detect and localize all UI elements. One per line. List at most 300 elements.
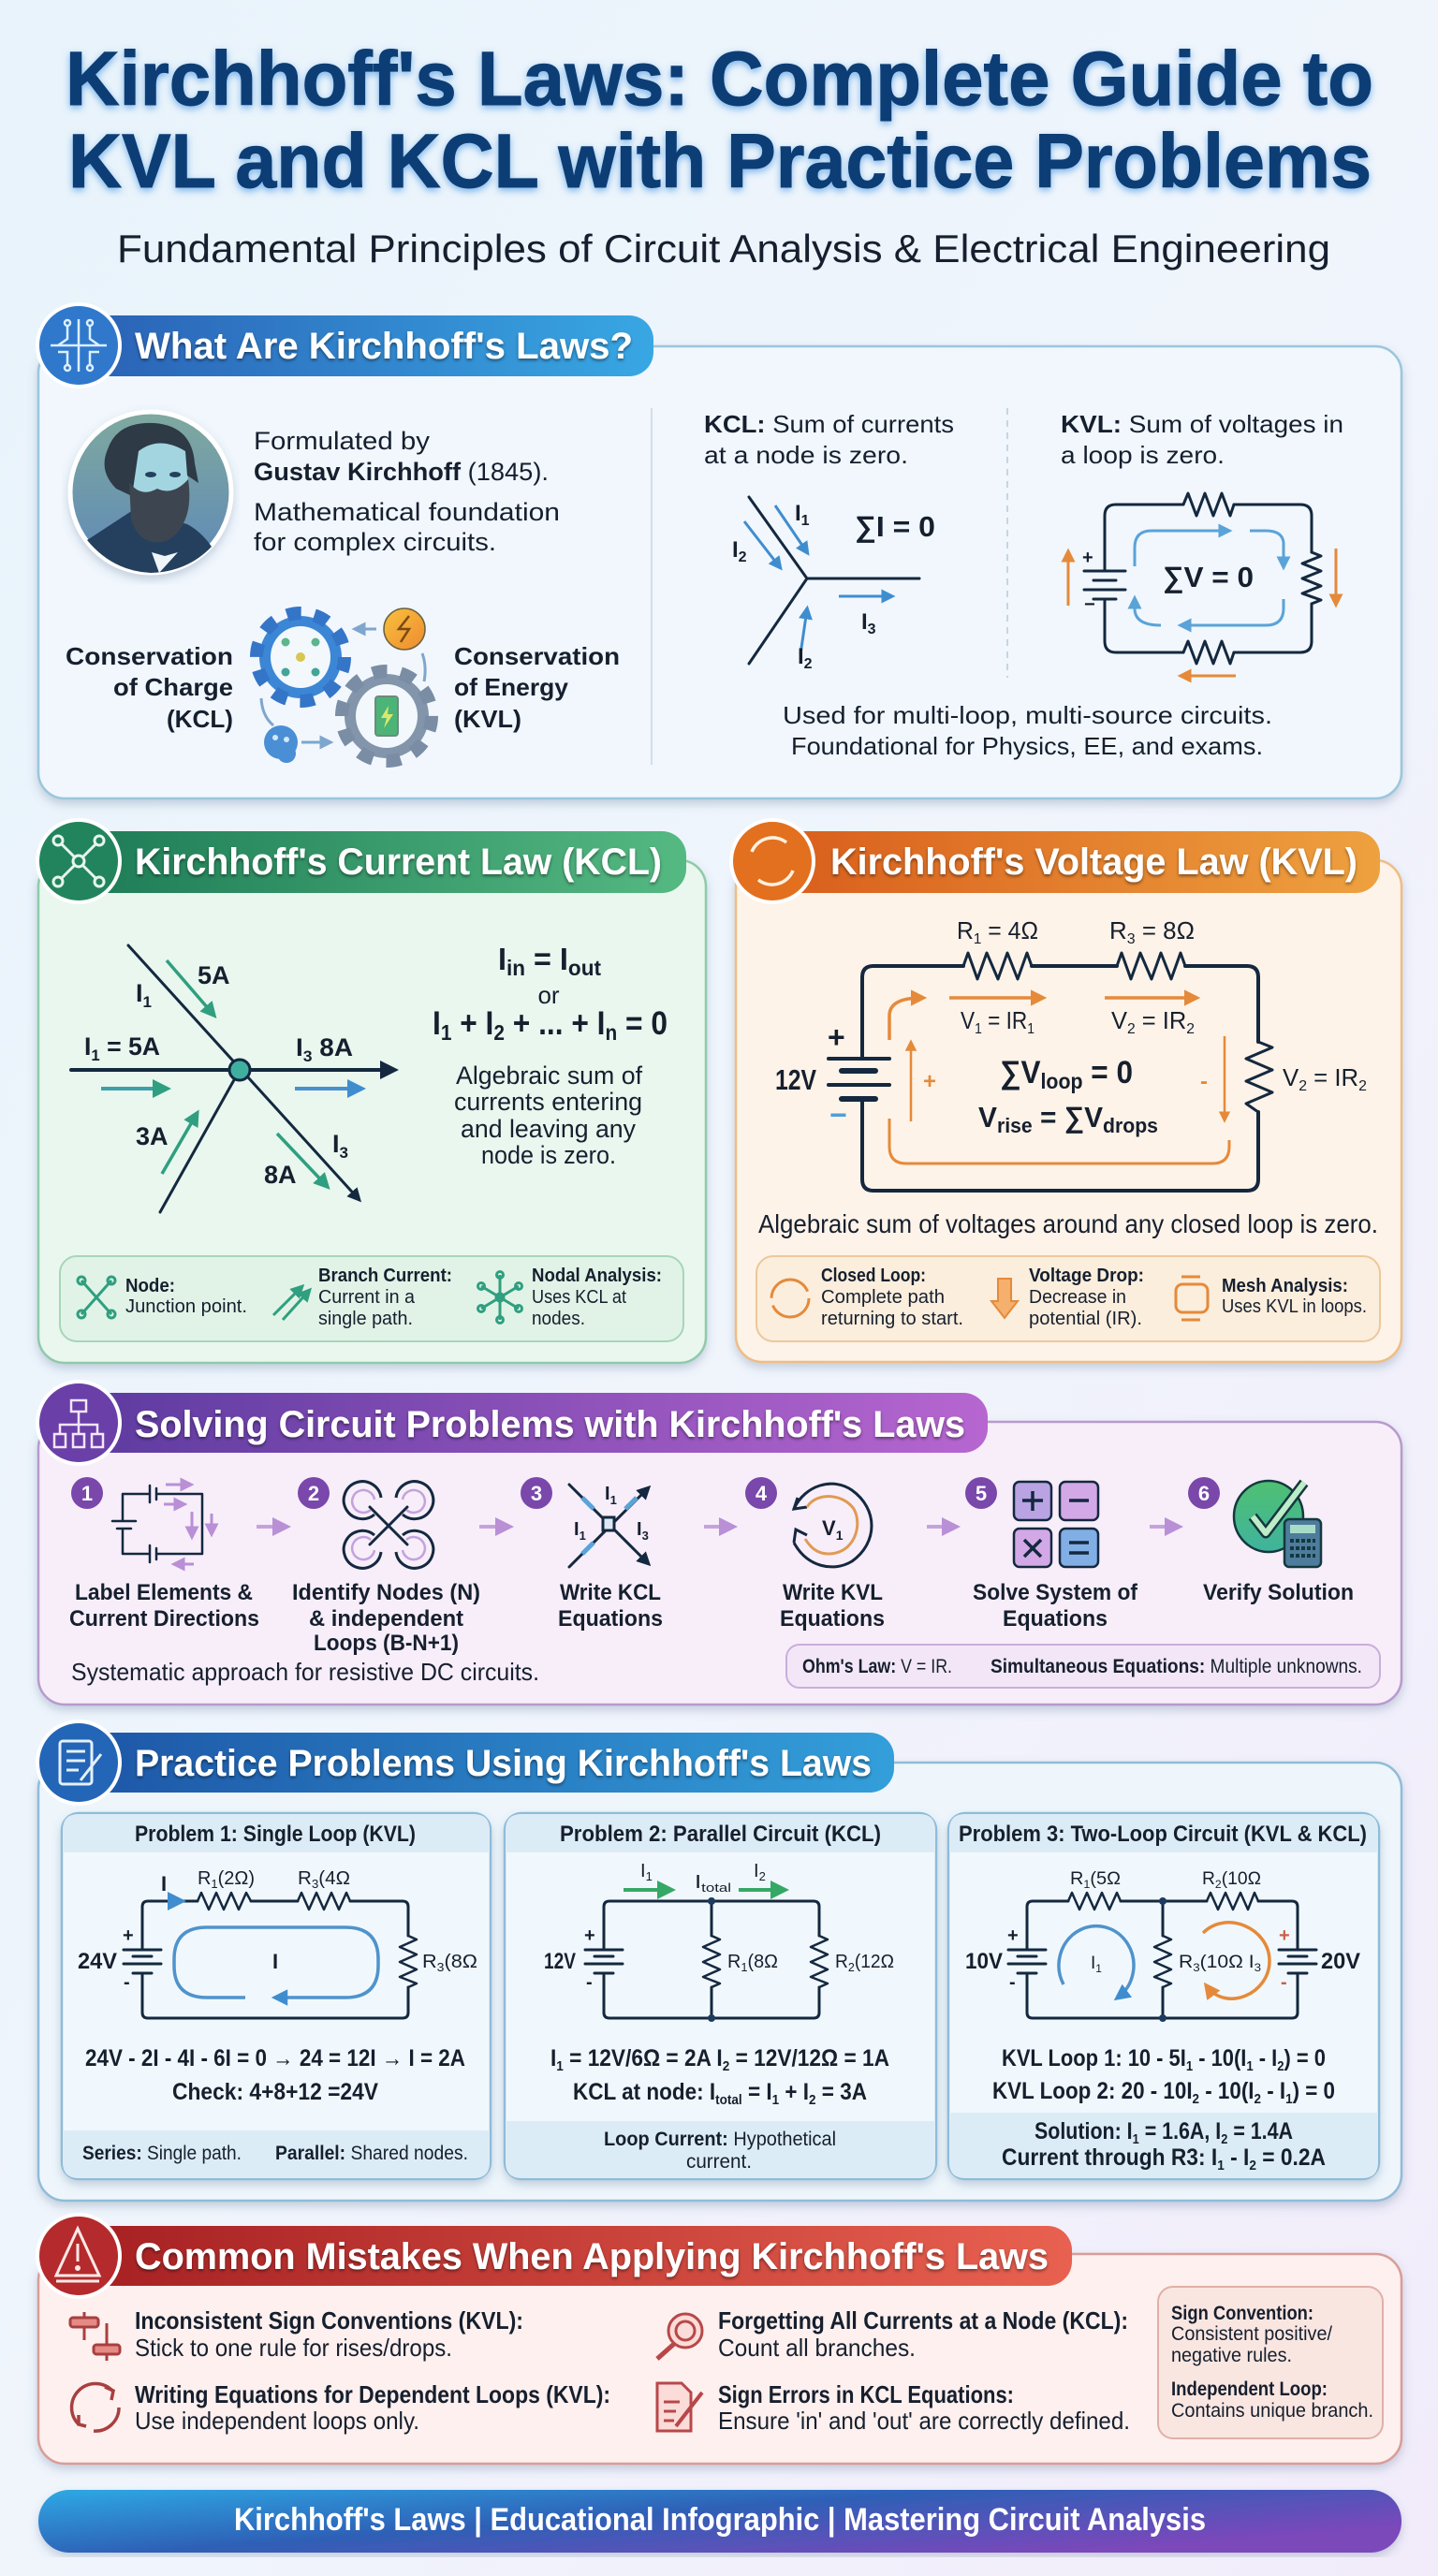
icon: node bbox=[78, 1277, 115, 1318]
circuit: parallel: 1 bbox=[741, 1960, 748, 1974]
mistake 3 bbox=[657, 2306, 1128, 2362]
icon: KCL node: I bbox=[605, 1484, 610, 1504]
text: usage note: Used for multi-loop, multi-source circuits. bbox=[783, 701, 1272, 729]
circuit: two loops bbox=[965, 1869, 1360, 2022]
diagram: KVL circuit: 1 bbox=[975, 1021, 982, 1037]
panel card bbox=[38, 1763, 1401, 2201]
term: node: Junction point. bbox=[125, 1296, 247, 1317]
badge 6 bbox=[1188, 1477, 1220, 1509]
icon: KCL node: 3 bbox=[642, 1529, 649, 1543]
circuit: single loop: 3 bbox=[437, 1960, 445, 1974]
diagram: KCL junction: 3A bbox=[136, 1122, 169, 1150]
icon: gears bbox=[257, 608, 432, 763]
icon: KCL node: I bbox=[574, 1519, 580, 1540]
diagram: KCL node: I bbox=[732, 537, 739, 563]
text: KCL definition: at a node is zero. bbox=[704, 441, 908, 469]
solution 3: 2 bbox=[1277, 2058, 1284, 2074]
circuit: two loops: (10Ω I bbox=[1200, 1953, 1255, 1972]
panel card bbox=[38, 1422, 1401, 1705]
arrow 1 to 2 bbox=[257, 1525, 286, 1529]
solution 1: 24V - 2I - 4I - 6I = 0 → 24 = 12I → I = 2A bbox=[85, 2045, 465, 2071]
solution 3: - I bbox=[1254, 2045, 1277, 2071]
diagram: KVL circuit: V bbox=[978, 1101, 998, 1134]
text: KVL description: Algebraic sum of voltages around any closed loop is zero. bbox=[758, 1209, 1378, 1238]
step label 5: Solve System of bbox=[973, 1580, 1138, 1605]
glossary: solving terms: Ohm's Law: V = IR. bbox=[802, 1656, 952, 1677]
solution 3: 2 bbox=[1255, 2091, 1261, 2107]
diagram: KVL circuit: + bbox=[923, 1069, 936, 1094]
circuit: parallel: 12V bbox=[544, 1949, 576, 1974]
term: voltage drop: Decrease in bbox=[1029, 1287, 1126, 1308]
text: about Kirchhoff: for complex circuits. bbox=[254, 528, 496, 556]
step label 5: Equations bbox=[1003, 1606, 1108, 1632]
solution 2: total bbox=[715, 2092, 742, 2108]
badge 2: 2 bbox=[308, 1482, 319, 1505]
step label 2: Loops (B-N+1) bbox=[314, 1631, 459, 1656]
step label 2: Identify Nodes (N) bbox=[292, 1580, 480, 1605]
solution 2: 1 bbox=[556, 2058, 564, 2074]
solution 1: Check: 4+8+12 =24V bbox=[172, 2079, 378, 2105]
circuit: single loop: I bbox=[272, 1950, 278, 1973]
section header bbox=[731, 820, 1380, 902]
icon: KVL loop: V bbox=[822, 1516, 836, 1540]
text: KVL definition bbox=[1061, 410, 1343, 469]
formula: KCL: or bbox=[537, 981, 560, 1009]
solution 2: KCL at node: I bbox=[573, 2079, 731, 2105]
solution 2: 2 bbox=[723, 2058, 729, 2074]
solution 2: I bbox=[550, 2045, 557, 2071]
badge 3 bbox=[521, 1477, 552, 1509]
circuit: single loop: (4Ω bbox=[318, 1868, 350, 1889]
circuit: two loops: 10V bbox=[965, 1949, 1003, 1974]
solution 3: 2 bbox=[1193, 2091, 1199, 2107]
circuit: two loops: (5Ω bbox=[1090, 1869, 1121, 1889]
icon: voltage drop arrow bbox=[991, 1279, 1018, 1318]
label: conservation of energy bbox=[454, 642, 620, 733]
circuit: parallel: (12Ω bbox=[855, 1952, 894, 1972]
diagram: KVL circuit: = IR bbox=[982, 1006, 1027, 1034]
label: conservation of charge: of Charge bbox=[113, 673, 233, 701]
notes 1: Series: Single path. bbox=[82, 2143, 242, 2164]
notes 1 bbox=[82, 2143, 468, 2164]
diagram: KVL circuit: R bbox=[1109, 916, 1127, 944]
panel card bbox=[736, 860, 1401, 1362]
diagram: KVL circuit: 2 bbox=[1127, 1021, 1136, 1037]
section header: Kirchhoff's Current Law (KCL) bbox=[135, 842, 662, 883]
arrow 2 to 3 bbox=[479, 1525, 508, 1529]
text: usage note bbox=[783, 701, 1272, 760]
term: branch current: Branch Current: bbox=[318, 1266, 452, 1286]
text: Sign Errors in KCL Equations: bbox=[718, 2380, 1014, 2408]
text: KCL description: currents entering bbox=[454, 1088, 642, 1116]
formula: KCL bbox=[433, 942, 668, 1045]
formula: KCL: in bbox=[506, 956, 525, 980]
circuit: parallel: I bbox=[640, 1861, 646, 1881]
circuit: two loops: R bbox=[1202, 1869, 1215, 1889]
circuit: two loops: + bbox=[1279, 1925, 1290, 1946]
glossary: mistakes terms: negative rules. bbox=[1171, 2345, 1292, 2366]
diagram: KVL circuit: ∑V bbox=[1000, 1055, 1044, 1090]
circuit: single loop: R bbox=[422, 1952, 435, 1972]
mistake 2 bbox=[72, 2380, 610, 2435]
notes 2 bbox=[604, 2129, 836, 2173]
diagram: KVL circuit: + bbox=[828, 1020, 845, 1054]
label: conservation of energy: Conservation bbox=[454, 642, 620, 670]
circuit: parallel: (8Ω bbox=[748, 1952, 778, 1972]
term: branch current: Current in a bbox=[318, 1287, 416, 1308]
text bbox=[135, 2380, 610, 2435]
circuit: two loops: 20V bbox=[1321, 1949, 1360, 1974]
diagram: KCL node: 2 bbox=[739, 549, 747, 565]
solution 2: 2 bbox=[809, 2092, 816, 2108]
step label 4: Write KVL bbox=[783, 1580, 883, 1605]
glossary: mistakes terms bbox=[1158, 2287, 1383, 2438]
text: Inconsistent Sign Conventions (KVL): bbox=[135, 2306, 523, 2334]
glossary: solving terms: Simultaneous Equations: Multiple unknowns. bbox=[990, 1656, 1362, 1677]
step 5 bbox=[965, 1477, 1138, 1632]
section header bbox=[37, 1721, 894, 1804]
circuit: parallel: 2 bbox=[848, 1960, 855, 1974]
solution 3: = 0.2A bbox=[1256, 2144, 1326, 2171]
text bbox=[718, 2306, 1128, 2362]
diagram: KCL node: ∑I = 0 bbox=[855, 510, 935, 543]
diagram: KCL junction: 3 bbox=[340, 1144, 348, 1162]
diagram: KVL loop: + bbox=[1082, 548, 1093, 568]
term: closed loop: Closed Loop: bbox=[821, 1266, 926, 1286]
solution 3: 1 bbox=[1285, 2091, 1293, 2107]
title: Kirchhoff's Laws: Complete Guide to bbox=[66, 37, 1373, 122]
diagram: KCL node: I bbox=[798, 644, 804, 669]
solution 3: = 1.4A bbox=[1227, 2118, 1293, 2144]
diagram: KVL circuit: rise bbox=[997, 1114, 1033, 1137]
label: conservation of charge bbox=[66, 642, 233, 733]
term: mesh analysis: Uses KVL in loops. bbox=[1222, 1296, 1367, 1317]
step label 2: & independent bbox=[309, 1606, 463, 1632]
diagram: KCL junction: 8A bbox=[264, 1161, 297, 1189]
circuit: single loop: + bbox=[123, 1925, 134, 1946]
diagram: KCL junction: I bbox=[136, 979, 143, 1007]
step 2 bbox=[292, 1477, 480, 1656]
solution 3: 1 bbox=[1186, 2058, 1193, 2074]
solution 2: = 12V/6Ω = 2A bbox=[564, 2045, 712, 2071]
circuit: two loops: 1 bbox=[1083, 1878, 1091, 1891]
icon: KVL loop: 1 bbox=[836, 1528, 844, 1543]
diagram: KCL junction: = 5A bbox=[100, 1032, 160, 1061]
step label 5 bbox=[973, 1580, 1138, 1632]
circuit: parallel: - bbox=[586, 1972, 593, 1993]
icon: operator buttons bbox=[1014, 1482, 1098, 1567]
solution 3: - I bbox=[1261, 2078, 1285, 2104]
badge 3: 3 bbox=[531, 1482, 542, 1505]
circuit: single loop: - bbox=[124, 1972, 130, 1993]
badge 4: 4 bbox=[756, 1482, 768, 1505]
formula: KCL: + ... + I bbox=[505, 1005, 605, 1042]
badge 5: 5 bbox=[976, 1482, 987, 1505]
glossary: mistakes terms: Sign Convention: bbox=[1171, 2303, 1313, 2324]
diagram: KVL circuit: 12V bbox=[775, 1063, 816, 1096]
step 3 bbox=[521, 1477, 663, 1632]
glossary: mistakes terms: Independent Loop: bbox=[1171, 2378, 1328, 2400]
title: KVL and KCL with Practice Problems bbox=[68, 119, 1372, 204]
circuit: parallel: + bbox=[584, 1925, 595, 1946]
section header bbox=[37, 304, 653, 387]
text: about Kirchhoff: Formulated by bbox=[254, 427, 431, 455]
solution 3: KVL Loop 2: 20 - 10I bbox=[992, 2078, 1215, 2104]
problem 1 title: Problem 1: Single Loop (KVL) bbox=[135, 1822, 416, 1847]
text bbox=[718, 2380, 1130, 2435]
text: Forgetting All Currents at a Node (KCL): bbox=[718, 2306, 1128, 2334]
formula: KCL: = I bbox=[525, 942, 568, 976]
glossary: solving terms bbox=[786, 1645, 1380, 1688]
step 1 bbox=[69, 1477, 259, 1632]
diagram: KCL node: 1 bbox=[801, 513, 810, 529]
icon: branch arrows bbox=[273, 1287, 309, 1320]
section header: Kirchhoff's Voltage Law (KVL) bbox=[830, 842, 1357, 883]
icon: nodal network bbox=[477, 1271, 522, 1324]
badge 5 bbox=[965, 1477, 997, 1509]
solution 2: 1 bbox=[772, 2092, 779, 2108]
circuit: parallel: R bbox=[727, 1952, 741, 1972]
icon: KCL node bbox=[569, 1484, 649, 1567]
circuit: single loop bbox=[78, 1868, 477, 2018]
circuit: two loops: R bbox=[1179, 1953, 1192, 1972]
solution 3: Solution: I bbox=[1034, 2118, 1149, 2144]
label: conservation of charge: Conservation bbox=[66, 642, 233, 670]
glossary: KCL terms bbox=[60, 1256, 683, 1341]
formula: KCL: + I bbox=[451, 1005, 493, 1042]
circuit: parallel: 1 bbox=[646, 1869, 653, 1883]
panel card bbox=[38, 346, 1401, 798]
term: voltage drop: Voltage Drop: bbox=[1029, 1266, 1144, 1286]
label: conservation of energy: of Energy bbox=[454, 673, 569, 701]
diagram: KCL node: I bbox=[861, 609, 868, 635]
step label 6: Verify Solution bbox=[1203, 1580, 1354, 1605]
diagram: KCL junction: 1 bbox=[91, 1046, 100, 1064]
diagram: KCL node: 2 bbox=[804, 656, 813, 672]
diagram: KVL loop: ∑V = 0 bbox=[1163, 561, 1254, 593]
term: closed loop bbox=[821, 1266, 963, 1329]
text: KVL definition: a loop is zero. bbox=[1061, 441, 1225, 469]
section header bbox=[37, 2215, 1072, 2297]
diagram: KVL circuit: = IR bbox=[1307, 1063, 1358, 1091]
diagram: KVL circuit: 2 bbox=[1358, 1078, 1367, 1094]
solution 3: 1 bbox=[1246, 2058, 1254, 2074]
diagram: KVL circuit: V bbox=[1283, 1063, 1299, 1091]
step label 2 bbox=[292, 1580, 480, 1656]
diagram: KCL junction: 5A bbox=[198, 961, 230, 989]
badge 4 bbox=[745, 1477, 777, 1509]
arrow 4 to 5 bbox=[927, 1525, 955, 1529]
circuit: parallel: 2 bbox=[759, 1869, 766, 1883]
footer bar: Kirchhoff's Laws | Educational Infographic | Mastering Circuit Analysis bbox=[234, 2502, 1206, 2538]
circuit: single loop: (8Ω bbox=[445, 1952, 477, 1972]
icon: KCL node: 1 bbox=[580, 1529, 586, 1543]
solution 2: = I bbox=[742, 2079, 772, 2105]
section header: Practice Problems Using Kirchhoff's Laws bbox=[135, 1743, 872, 1784]
circuit: two loops: (10Ω bbox=[1222, 1869, 1261, 1889]
term: voltage drop bbox=[1029, 1266, 1144, 1329]
icon: mesh bbox=[1176, 1277, 1208, 1320]
icon: magnifier bbox=[657, 2314, 702, 2359]
term: branch current bbox=[318, 1266, 452, 1329]
solution 3: 1 bbox=[1217, 2158, 1225, 2174]
term: node: Node: bbox=[125, 1276, 175, 1296]
formula: KCL: n bbox=[605, 1020, 617, 1045]
arrow 3 to 4 bbox=[704, 1525, 732, 1529]
circuit: two loops: + bbox=[1007, 1925, 1019, 1946]
term: closed loop: returning to start. bbox=[821, 1309, 963, 1329]
icon: dependent loop bbox=[72, 2384, 119, 2431]
solution 3: ) = 0 bbox=[1293, 2078, 1335, 2104]
panel: Kirchhoff's Voltage Law bbox=[731, 820, 1401, 1362]
label: conservation of charge: (KCL) bbox=[167, 705, 233, 733]
badge 6: 6 bbox=[1198, 1482, 1210, 1505]
diagram: KVL loop: − bbox=[1084, 594, 1095, 615]
diagram: KVL circuit: 1 bbox=[1027, 1021, 1034, 1037]
formula: KCL: out bbox=[568, 956, 601, 980]
diagram: KVL circuit: = 8Ω bbox=[1136, 916, 1195, 944]
text: approach note: Systematic approach for resistive DC circuits. bbox=[71, 1658, 539, 1686]
diagram: KCL node: 3 bbox=[868, 622, 876, 637]
diagram: KVL circuit: = 0 bbox=[1083, 1055, 1133, 1090]
term: node bbox=[125, 1276, 247, 1317]
notes 1: Parallel: Shared nodes. bbox=[275, 2143, 468, 2164]
glossary: mistakes terms: Contains unique branch. bbox=[1171, 2400, 1373, 2422]
solution 2: + I bbox=[779, 2079, 809, 2105]
solution 3: = 1.6A, I bbox=[1139, 2118, 1221, 2144]
diagram: KCL junction: I bbox=[332, 1130, 340, 1158]
badge 1: 1 bbox=[81, 1482, 93, 1505]
diagram: KCL junction: I bbox=[296, 1033, 303, 1061]
problem 2 card bbox=[505, 1813, 936, 2179]
icon: nodes and loops bbox=[344, 1482, 433, 1568]
circuit: two loops: 1 bbox=[1095, 1962, 1102, 1975]
solution 3: - 10(I bbox=[1199, 2078, 1255, 2104]
icon: closed loop bbox=[771, 1280, 809, 1317]
circuit: parallel: total bbox=[701, 1881, 731, 1895]
text bbox=[135, 2306, 523, 2362]
step label 3: Write KCL bbox=[560, 1580, 661, 1605]
glossary: KVL terms bbox=[756, 1256, 1380, 1341]
solution 3 bbox=[992, 2045, 1335, 2174]
step label 3 bbox=[558, 1580, 663, 1632]
circuit: single loop: I bbox=[161, 1872, 167, 1895]
diagram: KVL circuit: − bbox=[829, 1098, 847, 1132]
notes 2: Loop Current: Hypothetical bbox=[604, 2129, 836, 2150]
diagram: KVL circuit: V bbox=[1111, 1006, 1127, 1034]
text: KCL description: Algebraic sum of bbox=[456, 1061, 642, 1090]
diagram: KVL circuit: V bbox=[961, 1006, 976, 1034]
diagram: KVL circuit: R bbox=[957, 916, 975, 944]
problem 3 card bbox=[948, 1813, 1379, 2179]
solution 3: 1 bbox=[1133, 2131, 1139, 2147]
diagram: KCL junction bbox=[71, 945, 393, 1212]
text: KCL description bbox=[454, 1061, 642, 1169]
text: Stick to one rule for rises/drops. bbox=[135, 2334, 452, 2362]
badge 2 bbox=[298, 1477, 330, 1509]
icon: KCL node: 1 bbox=[610, 1493, 617, 1507]
circuit: two loops: - bbox=[1009, 1972, 1016, 1993]
term: mesh analysis: Mesh Analysis: bbox=[1222, 1276, 1348, 1296]
circuit: single loop: 1 bbox=[211, 1877, 218, 1891]
text: KVL definition: KVL: Sum of voltages in bbox=[1061, 410, 1343, 438]
solution 2: I bbox=[711, 2045, 723, 2071]
title bbox=[66, 37, 1373, 204]
text: about Kirchhoff: Gustav Kirchhoff (1845). bbox=[254, 458, 549, 486]
solution 2: = 12V/12Ω = 1A bbox=[729, 2045, 889, 2071]
text: usage note: Foundational for Physics, EE, and exams. bbox=[791, 732, 1263, 760]
mistake 1 bbox=[70, 2306, 523, 2362]
formula: KCL: = 0 bbox=[617, 1005, 668, 1042]
panel card bbox=[38, 2254, 1401, 2464]
step label 1 bbox=[69, 1580, 259, 1632]
circuit: two loops: I bbox=[1091, 1954, 1095, 1973]
icon: notepad bbox=[657, 2383, 702, 2431]
panel: Common Mistakes bbox=[37, 2215, 1401, 2464]
circuit: parallel: I bbox=[695, 1872, 700, 1893]
step label 1: Current Directions bbox=[69, 1606, 259, 1632]
diagram: KVL loop bbox=[1068, 493, 1336, 676]
glossary: mistakes terms: Consistent positive/ bbox=[1171, 2323, 1332, 2345]
term: nodal analysis: Nodal Analysis: bbox=[532, 1266, 662, 1286]
text: KCL description: and leaving any bbox=[461, 1115, 636, 1143]
diagram: KVL circuit: 2 bbox=[1299, 1078, 1307, 1094]
circuit: single loop: 24V bbox=[78, 1949, 117, 1974]
icon: KVL loop bbox=[794, 1484, 872, 1567]
text: Writing Equations for Dependent Loops (KVL): bbox=[135, 2380, 610, 2408]
notes 2: current. bbox=[686, 2151, 752, 2173]
diagram: KVL circuit: 2 bbox=[1186, 1021, 1195, 1037]
subtitle: Fundamental Principles of Circuit Analysis & Electrical Engineering bbox=[117, 227, 1330, 271]
step label 4 bbox=[780, 1580, 885, 1632]
badge 1 bbox=[71, 1477, 103, 1509]
diagram: KCL junction: 3 bbox=[303, 1047, 313, 1065]
text: about Kirchhoff: Mathematical foundation bbox=[254, 498, 560, 526]
diagram: KCL node bbox=[732, 497, 935, 672]
term: closed loop: Complete path bbox=[821, 1287, 945, 1308]
text: about Kirchhoff bbox=[254, 427, 560, 556]
solution 3: KVL Loop 1: 10 - 5I bbox=[1002, 2045, 1212, 2071]
step label 1: Label Elements & bbox=[75, 1580, 253, 1605]
diagram: KVL circuit: drops bbox=[1103, 1114, 1158, 1137]
footer bar bbox=[38, 2490, 1401, 2553]
section header bbox=[37, 1382, 988, 1464]
circuit: single loop: R bbox=[198, 1868, 211, 1889]
diagram: KCL junction: 8A bbox=[313, 1033, 353, 1061]
arrow 5 to 6 bbox=[1150, 1525, 1178, 1529]
text: KCL definition bbox=[704, 410, 954, 469]
step label 4: Equations bbox=[780, 1606, 885, 1632]
solution 1 bbox=[85, 2045, 465, 2105]
panel: Solving Circuit Problems bbox=[37, 1382, 1401, 1705]
panel: Practice Problems bbox=[37, 1721, 1401, 2201]
term: nodal analysis: Uses KCL at bbox=[532, 1287, 626, 1308]
circuit: two loops: 2 bbox=[1215, 1878, 1222, 1891]
text: Ensure 'in' and 'out' are correctly defined. bbox=[718, 2407, 1130, 2435]
solution 2 bbox=[550, 2045, 889, 2108]
section header: What Are Kirchhoff's Laws? bbox=[135, 326, 633, 367]
circuit: parallel: R bbox=[835, 1952, 848, 1972]
text: KCL description: node is zero. bbox=[481, 1141, 616, 1169]
circuit: two loops: R bbox=[1070, 1869, 1083, 1889]
icon: labelled circuit bbox=[112, 1485, 212, 1564]
formula: KCL: 1 bbox=[441, 1020, 452, 1045]
diagram: KVL circuit: = IR bbox=[1136, 1006, 1186, 1034]
diagram: KVL circuit: - bbox=[1200, 1069, 1208, 1094]
term: voltage drop: potential (IR). bbox=[1029, 1309, 1142, 1329]
problem 2 title: Problem 2: Parallel Circuit (KCL) bbox=[560, 1822, 881, 1847]
icon: sign slider bbox=[70, 2312, 120, 2361]
